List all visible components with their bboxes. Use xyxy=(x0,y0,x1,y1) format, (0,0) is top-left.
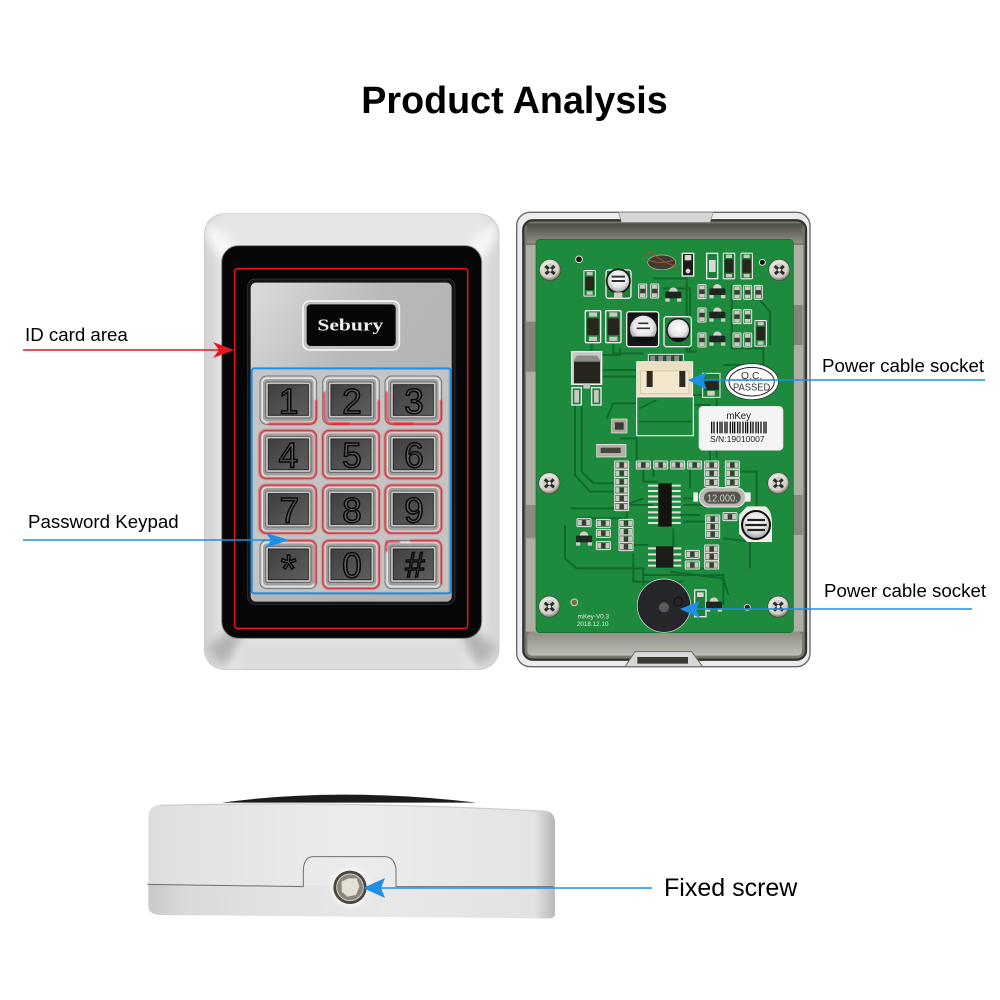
panel: keypad side view xyxy=(147,795,555,918)
key digits: 3 xyxy=(404,382,424,421)
recess around keypad plate xyxy=(248,279,455,604)
board version print: 2018.12.10 xyxy=(577,621,609,628)
crystal 12.000: 12.000. xyxy=(707,494,738,505)
key digits: 6 xyxy=(404,437,424,476)
power cable socket connector xyxy=(637,354,693,436)
seam and screw notch xyxy=(147,857,553,887)
key digits: * xyxy=(281,547,296,591)
callout: power cable socket upper xyxy=(688,355,985,390)
callout: Fixed screw: Fixed screw xyxy=(664,874,798,902)
PCB traces xyxy=(565,278,770,605)
key digits: 1 xyxy=(279,382,298,421)
IC U7 xyxy=(648,546,681,568)
title: Product Analysis xyxy=(361,79,668,121)
keypad plate xyxy=(251,283,452,602)
upper components xyxy=(584,252,766,347)
callout: power cable socket lower xyxy=(680,580,987,618)
callout: Fixed screw xyxy=(363,874,798,902)
Q.C. passed sticker: Q.C. xyxy=(741,371,762,382)
key digits: 0 xyxy=(342,547,362,586)
callout: power cable socket upper: Power cable socket xyxy=(822,355,985,376)
IC U2 xyxy=(648,483,681,527)
key digits: 5 xyxy=(342,437,362,476)
serial label: S/N:19010007 xyxy=(710,434,765,444)
Q.C. passed sticker: PASSED xyxy=(733,382,770,393)
key digits: 4 xyxy=(279,437,298,476)
callout: ID card area: ID card area xyxy=(25,324,128,345)
key digits: 7 xyxy=(280,491,299,530)
panel: circuit board rear view xyxy=(517,212,810,667)
crystal 12.000 xyxy=(693,488,751,507)
board version print xyxy=(577,614,609,628)
serial label: mKey xyxy=(726,411,751,422)
transistor beside connector xyxy=(703,373,720,397)
callout: Password Keypad: Password Keypad xyxy=(28,511,179,532)
board version print: mKey-V0.3 xyxy=(578,614,609,621)
fixing screw xyxy=(331,869,369,906)
logo window xyxy=(303,301,399,350)
callout: ID card area xyxy=(23,324,234,358)
black top of frame xyxy=(222,795,477,803)
green PCB xyxy=(536,239,793,633)
red ID card area outline xyxy=(235,269,468,628)
black frame xyxy=(222,246,482,638)
metal bezel xyxy=(197,212,507,672)
blue keypad outline xyxy=(252,368,451,593)
mounting screws xyxy=(539,256,790,617)
housing xyxy=(517,212,810,667)
buzzer xyxy=(637,579,722,632)
callout: power cable socket lower: Power cable socket xyxy=(824,580,987,601)
key digits xyxy=(279,382,425,591)
Q.C. passed sticker xyxy=(725,364,778,400)
key digits: 9 xyxy=(404,491,424,530)
panel: keypad front view xyxy=(197,212,507,672)
keys xyxy=(253,370,448,592)
electrolytic capacitor C18 xyxy=(739,507,772,542)
regulator Q7 xyxy=(572,352,602,405)
lower body shading xyxy=(148,885,555,918)
lower components xyxy=(576,419,739,569)
logo text: Sebury xyxy=(317,316,383,335)
top rim highlight xyxy=(160,804,545,811)
key digits: # xyxy=(405,546,425,585)
key digits: 2 xyxy=(342,382,362,421)
callout: Password Keypad xyxy=(23,511,289,548)
key digits: 8 xyxy=(342,491,362,530)
silver body xyxy=(148,803,555,918)
serial label xyxy=(699,406,783,450)
